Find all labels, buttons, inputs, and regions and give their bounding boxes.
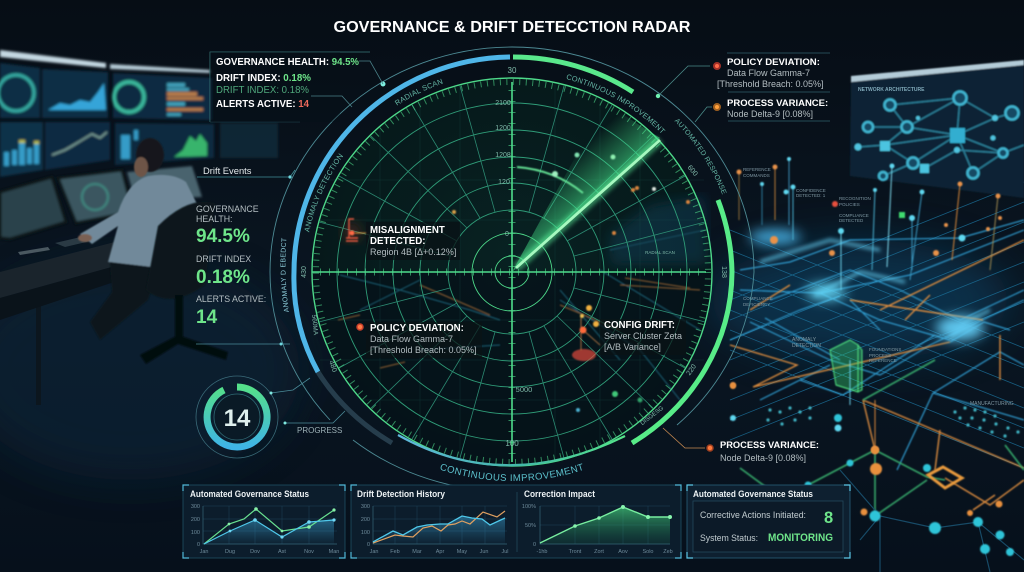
line chart: drift history: 0	[367, 542, 370, 548]
tiny circuit labels: DEFICIENCY	[743, 302, 770, 307]
curved label: continuous improvement top: CONTINUOUS IMPROVEMENT	[566, 74, 666, 133]
tiny circuit labels: DETECTED	[839, 218, 864, 223]
gauge: alerts donut	[196, 376, 310, 458]
area chart	[48, 83, 106, 110]
circuit traces orange	[730, 240, 1024, 510]
curved label: anomaly detection: ANOMALY DETECTION	[304, 153, 343, 232]
lower network nodes	[730, 383, 1020, 556]
data pins	[730, 157, 1002, 454]
line chart: drift history: May	[457, 549, 467, 555]
radar scale numbers: 138	[720, 266, 727, 278]
gauge: alerts donut: 14	[224, 405, 251, 432]
callout: misalignment: DETECTED:	[370, 236, 425, 247]
scene: circuit network at right	[700, 60, 1024, 572]
circuit traces green	[740, 360, 1024, 516]
crosshair	[312, 82, 706, 462]
panel: automated governance status summary: Automated Governance Status	[693, 489, 813, 500]
panel: left stats	[196, 204, 290, 346]
heading: drift detection history: Drift Detection History	[357, 489, 446, 500]
tiny circuit labels: FOUNDATIONS	[869, 347, 901, 352]
stat: system status: System Status:	[700, 533, 758, 543]
bars	[4, 142, 39, 166]
sweep trail and echoes	[452, 152, 690, 412]
radar dial background	[312, 77, 712, 467]
callout: policy deviation right: POLICY DEVIATION:	[727, 57, 820, 68]
callout: misalignment: MISALIGNMENT	[370, 225, 445, 236]
network monitor caption: NETWORK ARCHITECTURE	[858, 87, 925, 93]
callout: policy deviation on radar	[357, 322, 482, 358]
icon: alert marker	[343, 219, 366, 241]
radar scale numbers: RADIAL SCAN	[645, 250, 675, 255]
drift index line: DRIFT INDEX: 0.18%	[216, 73, 311, 84]
panel: left stats: GOVERNANCE	[196, 204, 259, 214]
panel: left stats: ALERTS ACTIVE:	[196, 294, 266, 304]
line chart: Dug	[225, 549, 235, 555]
tiny circuit labels: ANOMALY	[792, 337, 817, 343]
panel: top-left metrics	[210, 52, 383, 122]
tiny circuit labels: REFERENCE	[869, 358, 897, 363]
callout: policy deviation right	[656, 53, 830, 98]
orange chip	[928, 467, 962, 488]
icon: orange dot right	[714, 104, 720, 110]
stat: corrective actions: Corrective Actions Initiated:	[700, 510, 806, 520]
line chart: 200	[191, 517, 200, 523]
tiny circuit labels: RECOGNITION	[839, 196, 871, 201]
connector lines	[311, 61, 383, 107]
line chart: drift history: Jan	[370, 549, 378, 555]
area chart: correction impact: 50%	[525, 523, 536, 529]
callout: process variance bottom: PROCESS VARIANCE:	[720, 440, 819, 450]
scene: control room with operator	[0, 50, 300, 480]
callout: config drift: [A/B Variance]	[604, 342, 661, 352]
curved label: anomaly outer: ANOMALY D EBEDCT	[280, 238, 289, 312]
area chart: correction impact: -1hb	[536, 549, 548, 555]
line chart: drift history: Apr	[436, 549, 444, 555]
donut chart on monitor	[0, 75, 34, 111]
area chart: correction impact: 0	[533, 542, 536, 548]
area chart: correction impact: Zort	[594, 549, 604, 555]
tiny circuit labels: COMPLIANCE	[743, 296, 773, 301]
circuit glimpses inside radar	[338, 195, 708, 400]
panel: drift detection and correction	[351, 485, 681, 558]
area chart: correction impact: Tront	[569, 549, 582, 555]
tiny circuit labels: DETECTED: 1	[796, 193, 826, 198]
faint radar grid	[320, 85, 704, 459]
area chart: correction impact: Solo	[642, 549, 654, 555]
line chart: Jan	[200, 549, 208, 555]
line chart: Ast	[278, 549, 286, 555]
label: drift events	[197, 165, 295, 179]
callout: policy deviation right: Data Flow Gamma-7	[727, 68, 810, 78]
radar sweep	[512, 103, 660, 272]
line chart: Man	[329, 549, 339, 555]
green holographic block	[830, 340, 862, 392]
area chart: correction impact	[522, 504, 673, 555]
tiny circuit labels: PROCESS	[869, 353, 891, 358]
drift index repeated line: DRIFT INDEX: 0.18%	[216, 85, 309, 96]
line chart: Dov	[250, 549, 260, 555]
radar scale numbers: 220	[686, 363, 698, 377]
glowing hubs	[749, 229, 984, 340]
line chart: 0	[197, 542, 200, 548]
radar scale numbers: 1200	[495, 125, 511, 132]
callout: process variance right: Node Delta-9 [0.08%]	[727, 109, 813, 119]
callout: policy deviation on radar: POLICY DEVIATION:	[370, 323, 464, 334]
radar scale numbers: 480	[327, 360, 338, 373]
line chart: Nov	[304, 549, 314, 555]
icon: orange-red dot	[707, 445, 713, 451]
heading: correction impact: Correction Impact	[524, 489, 596, 500]
callout: process variance bottom	[663, 428, 819, 463]
server dots	[766, 406, 1020, 438]
curved label: automated response: AUTOMATED RESPONSE	[674, 119, 727, 194]
line chart: drift history	[361, 504, 509, 555]
area chart: correction impact: Aov	[618, 549, 628, 555]
curved label: continuous improvement bottom: CONTINUOUS IMPROVEMENT	[440, 463, 582, 481]
keyboard	[55, 236, 95, 247]
callout: process variance bottom: Node Delta-9 [0.08%]	[720, 453, 806, 463]
monitors wall	[0, 50, 278, 239]
radar scale numbers: 600	[686, 164, 699, 178]
panel: automated governance status chart: Automated Governance Status	[190, 489, 309, 500]
line chart: drift history: Jun	[480, 549, 488, 555]
stat: corrective actions: 8	[824, 509, 833, 527]
radar scale numbers: 5000	[516, 385, 532, 394]
line chart	[191, 504, 339, 555]
operator body	[78, 138, 198, 340]
tiny circuit labels	[743, 167, 1014, 407]
line chart: 300	[191, 504, 200, 510]
callout: policy deviation on radar: Data Flow Gamma-7	[370, 334, 453, 344]
radar scale numbers: DISGESG	[640, 405, 665, 427]
line chart: drift history: Feb	[390, 549, 400, 555]
range rings	[312, 78, 712, 466]
line chart: drift history: Mar	[412, 549, 422, 555]
lower monitors	[0, 177, 66, 239]
area chart: correction impact: Zeb	[663, 549, 673, 555]
icon: config drift markers	[572, 305, 600, 361]
tiny circuit labels: COMPLIANCE	[839, 213, 869, 218]
radar scale numbers	[301, 66, 727, 448]
radar scale numbers: 0	[505, 231, 509, 238]
icon: red dot right	[714, 63, 720, 69]
tiny circuit labels: CONFIDENCE	[796, 188, 826, 193]
curved label: radial scan: RADIAL SCAN	[394, 78, 443, 106]
radar scale numbers: 560MA	[310, 314, 319, 336]
tiny circuit labels: COMMANDS	[743, 173, 770, 178]
operator chair	[140, 202, 228, 364]
line chart: drift history: 300	[361, 504, 370, 510]
callout: misalignment	[343, 219, 460, 260]
tick ring	[316, 82, 708, 462]
radar scale numbers: 30	[508, 66, 517, 75]
callout: misalignment: Region 4B [Δ+0.12%]	[370, 247, 456, 257]
network monitor	[850, 60, 1024, 198]
tiny circuit labels: POLICIES	[839, 202, 860, 207]
radial spokes	[319, 86, 705, 458]
radar scale numbers: 2100	[495, 100, 511, 107]
perspective circuit grid	[730, 182, 1024, 468]
status arcs	[294, 57, 732, 465]
radar scale numbers: 120	[498, 179, 510, 186]
radar	[270, 46, 754, 485]
line chart: 100	[191, 530, 200, 536]
label: progress: PROGRESS	[297, 426, 342, 435]
panel: automated governance status summary	[687, 485, 850, 558]
callout: config drift	[572, 305, 686, 361]
callout: config drift: CONFIG DRIFT:	[604, 320, 675, 331]
value: alerts active: 14	[196, 307, 218, 328]
callout: config drift: Server Cluster Zeta	[604, 331, 682, 341]
radar scale numbers: 100	[505, 439, 519, 448]
title: GOVERNANCE & DRIFT DETECCTION RADAR	[334, 19, 691, 36]
callout: policy deviation right: [Threshold Breach: 0.05%]	[717, 79, 824, 89]
line chart: drift history: 100	[361, 530, 370, 536]
label: progress	[284, 411, 345, 435]
arc connector dot	[380, 82, 386, 86]
radar scale numbers: 430	[301, 266, 308, 278]
panel: left stats: DRIFT INDEX	[196, 254, 251, 264]
line chart: drift history: 200	[361, 517, 370, 523]
alerts active line: ALERTS ACTIVE: 14	[216, 99, 309, 110]
operator desk	[0, 238, 140, 298]
circuit traces blue	[730, 220, 1024, 470]
radar scale numbers: 1208	[495, 152, 511, 159]
icon: red dot	[357, 324, 363, 330]
tiny circuit labels: REFERENCE	[743, 167, 771, 172]
outer thin ring	[270, 47, 754, 487]
governance health line: GOVERNANCE HEALTH: 94.5%	[216, 57, 359, 68]
stat: system status: MONITORING	[768, 532, 833, 544]
panel: automated governance status chart	[183, 485, 345, 558]
line chart: drift history: Jul	[501, 549, 509, 555]
tiny circuit labels: DETECTION	[792, 343, 821, 349]
panel: left stats: HEALTH:	[196, 214, 232, 224]
value: governance health: 94.5%	[196, 226, 250, 247]
lower circuit traces	[700, 470, 1024, 572]
label: drift events: Drift Events	[203, 165, 252, 176]
value: drift index: 0.18%	[196, 267, 250, 288]
orange bars	[167, 92, 203, 111]
stat: system status	[700, 532, 833, 544]
area chart: correction impact: 100%	[522, 504, 536, 510]
tiny circuit labels: MANUFACTURING	[970, 401, 1014, 407]
callout: process variance right: PROCESS VARIANCE:	[727, 98, 828, 109]
callout: policy deviation on radar: [Threshold Breach: 0.05%]	[370, 345, 477, 355]
stat: corrective actions	[700, 509, 833, 527]
callout: process variance right	[695, 98, 830, 122]
